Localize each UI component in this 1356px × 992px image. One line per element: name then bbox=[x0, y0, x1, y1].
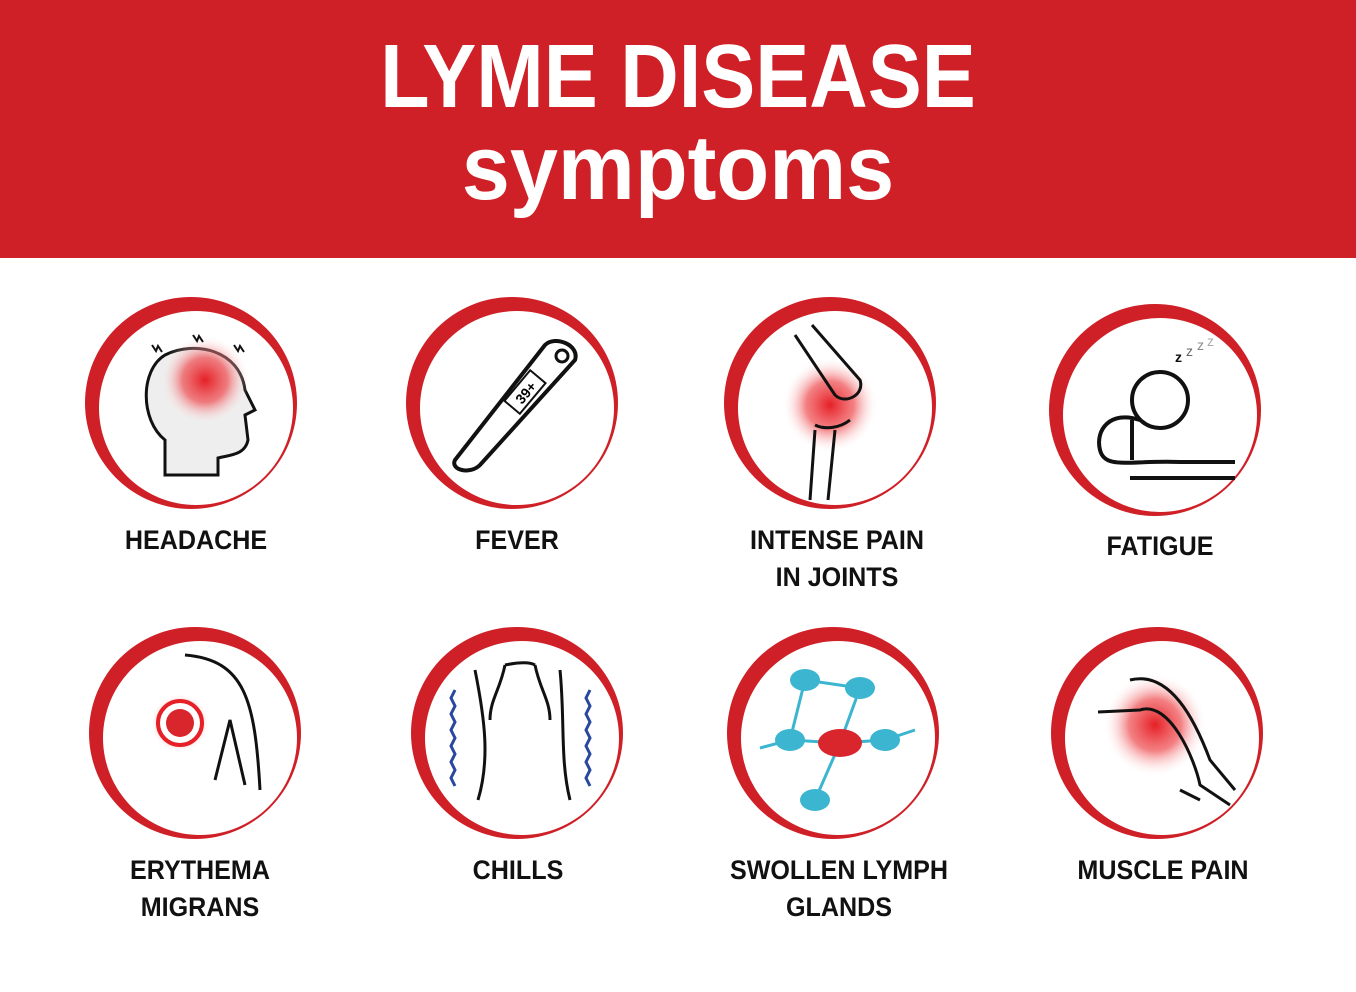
label: lymph: GLANDS bbox=[786, 892, 892, 922]
label: joints: IN JOINTS bbox=[776, 562, 898, 592]
icon: swollen lymph glands bbox=[727, 627, 939, 839]
icon: joints bbox=[724, 297, 936, 509]
icon: fatigue: z bbox=[1186, 343, 1193, 359]
label: lymph bbox=[730, 855, 948, 922]
label: fever: FEVER bbox=[475, 525, 559, 555]
icon: fatigue: z bbox=[1197, 337, 1204, 353]
label: fatigue: FATIGUE bbox=[1107, 531, 1213, 561]
icon: fever bbox=[406, 297, 618, 509]
title: LYME DISEASE bbox=[380, 27, 976, 127]
icon: headache bbox=[85, 297, 297, 509]
label: chills: CHILLS bbox=[473, 855, 563, 885]
label: joints: INTENSE PAIN bbox=[750, 525, 924, 555]
icon: fatigue: z bbox=[1207, 333, 1214, 349]
label: lymph: SWOLLEN LYMPH bbox=[730, 855, 948, 885]
label: erythema: MIGRANS bbox=[141, 892, 259, 922]
icon: muscle pain bbox=[1051, 627, 1263, 839]
label: erythema: ERYTHEMA bbox=[130, 855, 270, 885]
icon: fatigue: z bbox=[1175, 349, 1182, 365]
label: erythema bbox=[130, 855, 270, 922]
label: headache: HEADACHE bbox=[125, 525, 267, 555]
label: joints bbox=[750, 525, 924, 592]
icon: fatigue bbox=[1049, 304, 1261, 516]
icon: chills bbox=[411, 627, 623, 839]
icon: erythema migrans bbox=[89, 627, 301, 839]
header band bbox=[0, 0, 1356, 258]
icon: fever: 39+ bbox=[512, 378, 540, 407]
subtitle: symptoms bbox=[462, 117, 894, 219]
label: muscle pain: MUSCLE PAIN bbox=[1077, 855, 1249, 885]
